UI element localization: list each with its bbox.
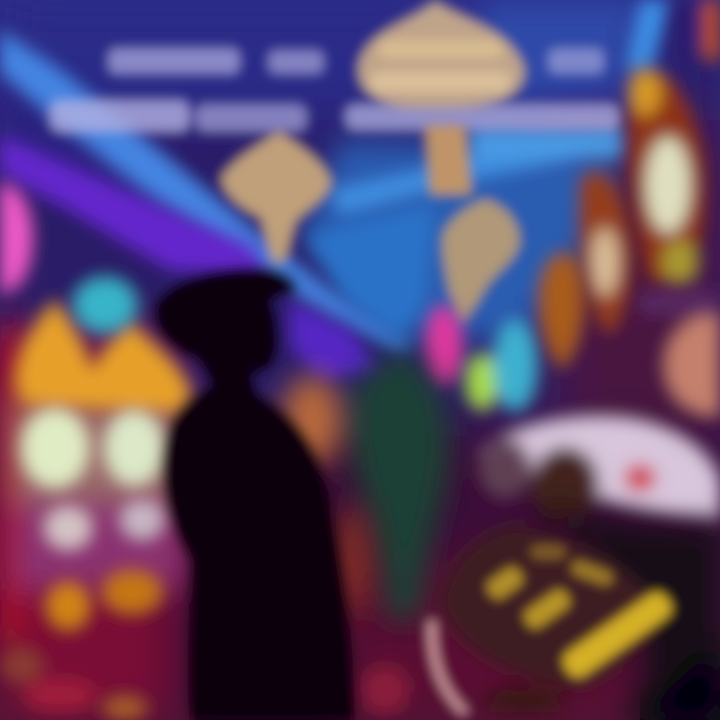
warm glow behind figure — [282, 375, 368, 615]
cyan orb — [73, 277, 137, 333]
gaming table: white top — [479, 416, 720, 523]
chandelier: top center — [358, 0, 525, 195]
right wall slot machines — [539, 0, 720, 370]
machine: far right — [629, 68, 705, 284]
ceiling: blue panels — [0, 0, 640, 340]
machine: middle — [579, 171, 630, 335]
light beam: purple band — [0, 135, 380, 380]
machine body — [0, 325, 185, 645]
neon pink light: left edge — [0, 183, 32, 293]
lower right shadow — [630, 640, 720, 720]
right edge dark column — [670, 0, 720, 60]
blurred sign text — [50, 48, 620, 132]
gaming table: felt with chips — [440, 525, 660, 690]
white reels — [21, 408, 164, 550]
machine: near — [539, 252, 584, 370]
light beam: horizontal cyan band — [330, 125, 625, 215]
neon lights: center — [426, 305, 537, 411]
slot machine: left — [0, 277, 190, 720]
background figure: green — [345, 352, 450, 620]
floor glow — [361, 666, 565, 714]
chips: yellow — [483, 545, 677, 683]
blue fan panel — [305, 205, 435, 340]
silhouette: person — [154, 268, 355, 720]
chandelier: right — [442, 198, 520, 325]
orange lights — [0, 570, 162, 720]
machine crown — [15, 300, 190, 412]
gaming table: dark rim and base — [530, 510, 720, 720]
table edge: pale curved rail — [432, 620, 466, 714]
right edge figure — [640, 290, 720, 417]
light beam: left diagonal — [0, 30, 415, 352]
light beam: top right — [625, 0, 672, 70]
chandelier: left — [220, 130, 332, 262]
